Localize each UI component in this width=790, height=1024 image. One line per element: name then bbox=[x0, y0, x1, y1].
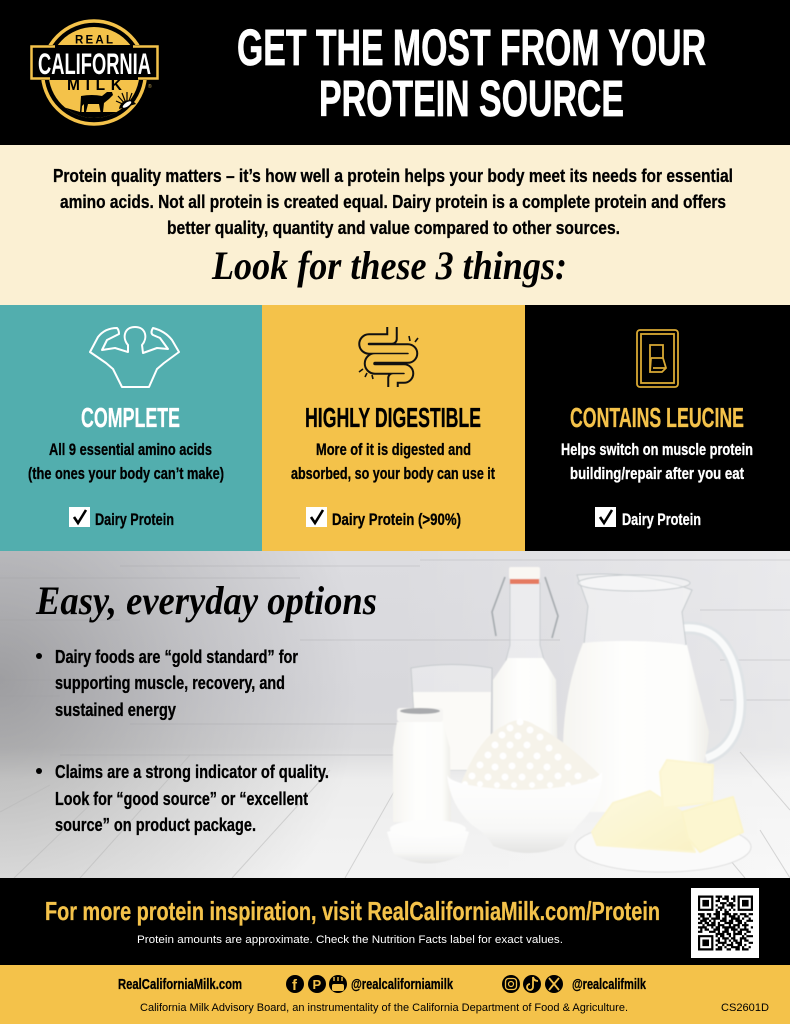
panel: everyday options photo bbox=[0, 551, 790, 878]
social handle: @realcaliforniamilk bbox=[351, 976, 453, 993]
icon: cow bbox=[80, 92, 113, 112]
bullet list: source” on product package. bbox=[55, 815, 256, 835]
social icons group one: P bbox=[312, 977, 322, 992]
intro text: better quality, quantity and value compared to other sources. bbox=[167, 217, 620, 238]
plate bbox=[575, 822, 751, 872]
bullet list: Dairy foods are “gold standard” for bbox=[55, 647, 298, 667]
social icons group one: f bbox=[292, 977, 298, 994]
checkbox: dairy protein: Dairy Protein bbox=[95, 510, 174, 529]
logo: Real California Milk: REAL bbox=[75, 34, 113, 46]
description: All 9 essential amino acids bbox=[49, 441, 212, 459]
panel: contains leucine bbox=[525, 305, 790, 551]
intro panel bbox=[0, 145, 790, 305]
jug glass bbox=[577, 574, 692, 645]
title: PROTEIN SOURCE bbox=[319, 70, 624, 127]
checkbox: dairy protein over 90 percent bbox=[306, 507, 461, 529]
heading: highly digestible: HIGHLY DIGESTIBLE bbox=[305, 402, 481, 433]
description bbox=[28, 441, 224, 483]
bullet list bbox=[36, 647, 329, 835]
cottage cheese bbox=[460, 720, 600, 790]
organization line: California Milk Advisory Board, an instrumentality of the California Department of Food & Agriculture. bbox=[140, 1002, 628, 1014]
document code: CS2601D bbox=[721, 1002, 769, 1014]
description bbox=[291, 441, 495, 483]
checkbox: dairy protein: Dairy Protein bbox=[622, 510, 701, 529]
logo: Real California Milk: MILK bbox=[67, 77, 123, 94]
photo: dairy products bbox=[387, 567, 751, 872]
website: RealCaliforniaMilk.com bbox=[118, 976, 242, 993]
bullet list: Look for “good source” or “excellent bbox=[55, 789, 308, 809]
icon: sun bbox=[116, 92, 136, 109]
call to action band bbox=[0, 878, 790, 965]
description: absorbed, so your body can use it bbox=[291, 465, 495, 483]
bullet list: Claims are a strong indicator of quality. bbox=[55, 762, 329, 782]
panel: complete bbox=[0, 305, 262, 551]
checkbox: dairy protein bbox=[595, 507, 701, 529]
social icons group two bbox=[502, 975, 563, 993]
logo: Real California Milk: ® bbox=[148, 83, 152, 90]
jug handle bbox=[684, 628, 740, 758]
icon: switch bbox=[637, 330, 678, 387]
bottle cap bbox=[509, 567, 540, 579]
bowl bbox=[447, 772, 602, 853]
intro text bbox=[53, 165, 733, 238]
checkbox: dairy protein over 90 percent: Dairy Protein (>90%) bbox=[332, 510, 461, 529]
logo: Real California Milk: CALIFORNIA bbox=[38, 48, 151, 81]
title bbox=[237, 19, 706, 127]
glass bbox=[411, 664, 492, 770]
bullet list: supporting muscle, recovery, and bbox=[55, 673, 285, 693]
bullet list: sustained energy bbox=[55, 700, 176, 720]
script heading: Look for these 3 things: bbox=[211, 243, 567, 288]
bottle milk bbox=[493, 658, 558, 770]
jug milk bbox=[563, 641, 709, 812]
dish of cream bbox=[387, 825, 469, 864]
logo: Real California Milk bbox=[31, 21, 158, 125]
description bbox=[561, 441, 753, 483]
footer band bbox=[0, 965, 790, 1024]
icon: flexing muscle figure bbox=[90, 327, 179, 387]
bottle neck bbox=[506, 583, 544, 660]
heading: easy, everyday options: Easy, everyday options bbox=[35, 578, 377, 623]
panel: highly digestible bbox=[262, 305, 525, 551]
disclaimer: Protein amounts are approximate. Check the Nutrition Facts label for exact values. bbox=[137, 934, 563, 946]
QR code bbox=[691, 888, 759, 958]
description: More of it is digested and bbox=[316, 441, 471, 459]
heading: complete: COMPLETE bbox=[81, 402, 180, 433]
social icons group one bbox=[286, 975, 347, 994]
butter blocks bbox=[592, 791, 695, 852]
icon: intestines bbox=[359, 327, 418, 387]
description: building/repair after you eat bbox=[570, 465, 744, 483]
small bottle bbox=[393, 722, 451, 822]
checkbox: dairy protein bbox=[69, 507, 174, 529]
description: (the ones your body can’t make) bbox=[28, 465, 224, 483]
social handle: @realcalifmilk bbox=[572, 976, 646, 993]
header band bbox=[30, 19, 706, 126]
